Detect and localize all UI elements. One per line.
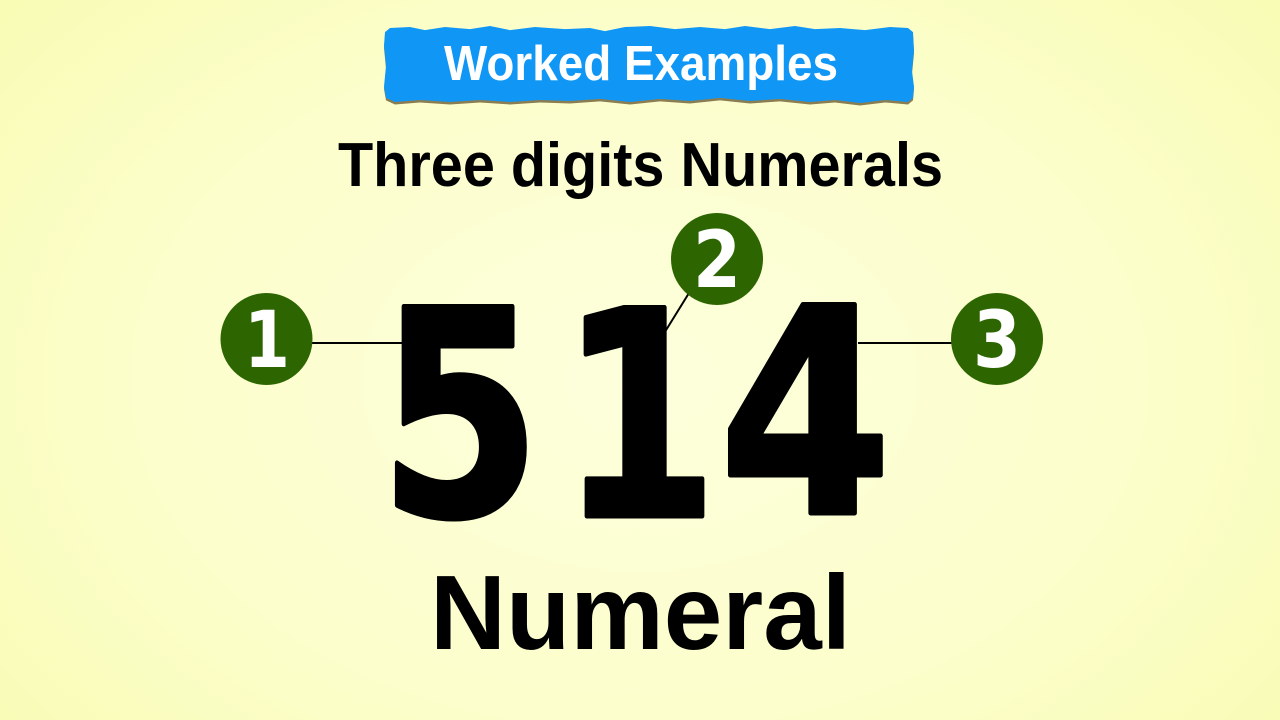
large number 514: 1	[560, 252, 718, 584]
leader line: digit 1	[312, 342, 448, 344]
heading: Three digits Numerals: Three digits Numerals	[338, 131, 943, 200]
banner label: Worked Examples	[444, 37, 838, 91]
marker 2	[671, 213, 763, 306]
large number 514: 4	[719, 249, 892, 581]
marker 2: 2	[693, 216, 741, 306]
marker 1: 1	[244, 296, 290, 386]
caption: Numeral: Numeral	[430, 554, 851, 672]
marker 3	[951, 293, 1043, 386]
large number 514: 5	[379, 251, 541, 583]
leader line: digit 2	[663, 293, 689, 335]
large number 514	[379, 249, 892, 584]
leader line: digit 3	[858, 342, 952, 344]
banner: Worked Examples	[384, 26, 914, 106]
marker 3: 3	[973, 296, 1021, 386]
marker 1	[220, 293, 312, 386]
